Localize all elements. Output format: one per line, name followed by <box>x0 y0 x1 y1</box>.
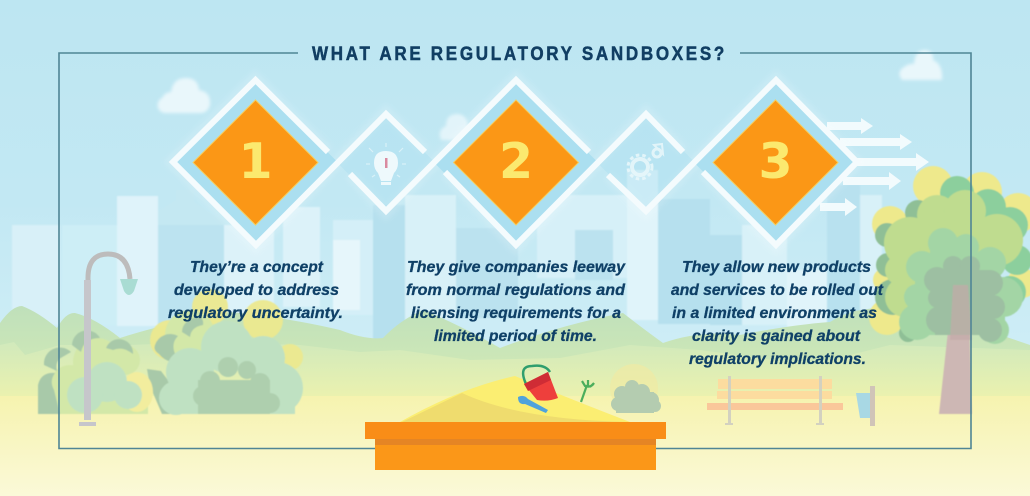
street lamp <box>79 254 138 426</box>
text block 1: developed to address <box>174 282 339 299</box>
text block 1: They’re a concept <box>190 259 324 276</box>
text block 3: in a limited environment as <box>672 305 877 322</box>
step 1 diamond: 1 <box>238 133 273 190</box>
small shrub <box>610 364 661 413</box>
diamond glow <box>172 78 857 247</box>
step 3 diamond: 3 <box>758 133 793 190</box>
icon: blue shovel <box>518 396 548 413</box>
icon: red bucket <box>523 366 558 401</box>
city skyline <box>12 170 882 340</box>
ground <box>0 396 1030 496</box>
sandbox <box>365 422 666 470</box>
text block 3: regulatory implications. <box>689 351 866 368</box>
icon: gears <box>628 144 663 179</box>
text block 2 <box>406 259 626 345</box>
text block 1 <box>168 259 343 322</box>
title: WHAT ARE REGULATORY SANDBOXES? <box>312 44 727 65</box>
left bushes <box>38 289 303 415</box>
icon: green rake <box>581 380 594 402</box>
text block 2: licensing requirements for a <box>411 305 621 322</box>
zigzag diamond outlines <box>173 80 857 245</box>
tree <box>869 166 1030 414</box>
text block 1: regulatory uncertainty. <box>168 305 343 322</box>
step 2 diamond: 2 <box>499 133 533 190</box>
icon: light bulb <box>366 143 406 185</box>
sand pile <box>400 376 630 422</box>
hills <box>0 306 1030 400</box>
trash bin <box>856 386 875 426</box>
text block 3: They allow new products <box>682 259 871 276</box>
text block 2: They give companies leeway <box>407 259 626 276</box>
inner diamond backings <box>173 80 857 245</box>
park bench <box>707 376 843 425</box>
step 2 diamond <box>454 100 578 225</box>
clouds <box>158 50 942 140</box>
text block 3: clarity is gained about <box>692 328 861 345</box>
arrows <box>820 118 929 216</box>
step 1 diamond <box>193 100 318 225</box>
text block 2: from normal regulations and <box>406 282 626 299</box>
text block 2: limited period of time. <box>434 328 597 345</box>
text block 3: and services to be rolled out <box>671 282 884 299</box>
frame border <box>59 53 971 448</box>
step 3 diamond <box>713 100 838 225</box>
text block 3 <box>671 259 884 368</box>
